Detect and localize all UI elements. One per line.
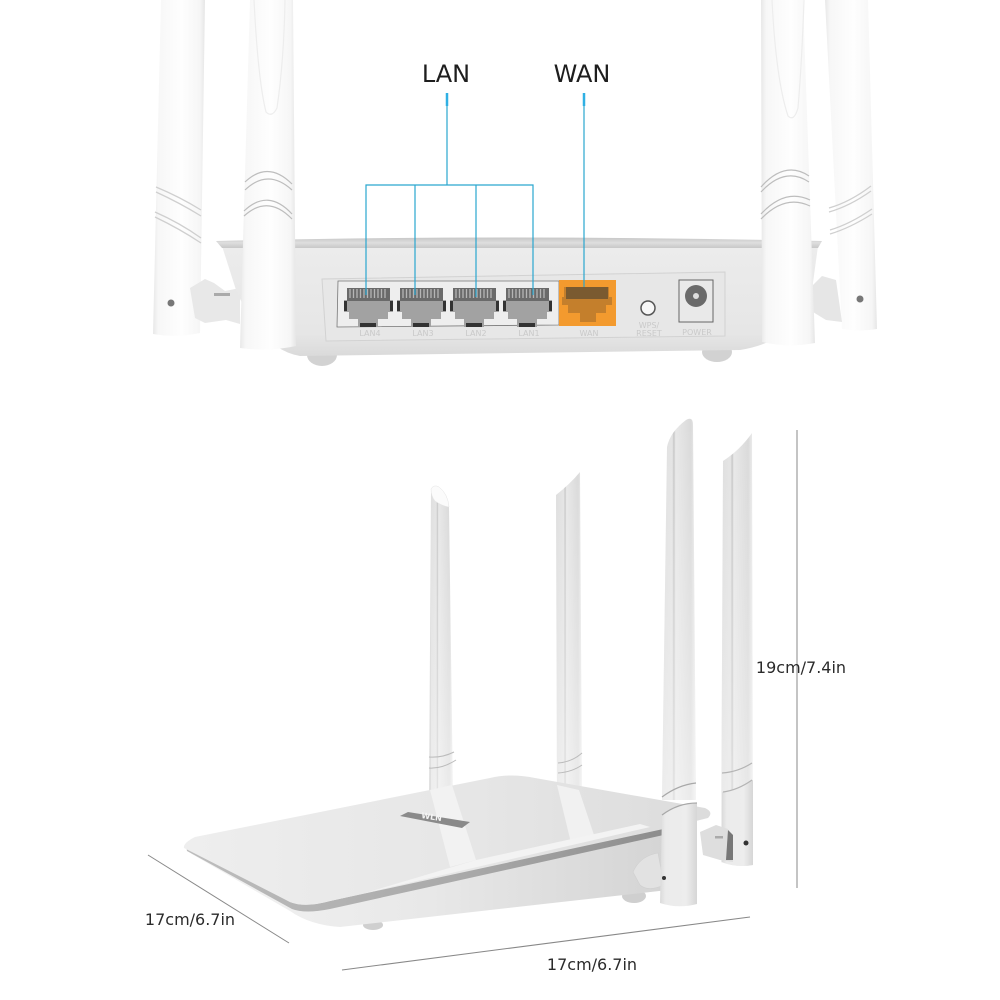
LAN port strip: [337, 281, 559, 327]
callout: LAN connector lines: [366, 93, 533, 297]
group: rear view of router: [153, 0, 877, 366]
label: WAN: WAN: [554, 60, 610, 88]
port LAN2: [450, 288, 499, 327]
port labels: WAN: [580, 329, 598, 338]
router lid edge: [216, 238, 822, 248]
port labels: [359, 321, 712, 338]
port labels: LAN2: [465, 329, 487, 338]
antenna: rear far left: [153, 0, 205, 336]
dimension: width line: [342, 917, 750, 970]
lid glossy band right: [557, 785, 595, 843]
port panel: [322, 272, 725, 341]
callout: WAN connector line: [583, 93, 585, 287]
antenna: back left: [429, 486, 456, 800]
port LAN3: [397, 288, 446, 327]
hinge left: [190, 279, 240, 324]
feet: [307, 344, 337, 366]
port labels: RESET: [636, 329, 662, 338]
WAN orange block: [559, 280, 616, 326]
port WAN: [562, 287, 612, 322]
antenna: rear inner left: [240, 0, 296, 350]
port labels: POWER: [682, 328, 712, 337]
brand badge: [400, 811, 470, 828]
port labels: LAN3: [412, 329, 434, 338]
antenna: front left tall: [660, 419, 697, 906]
router foot right: [622, 889, 646, 903]
port labels: WPS/: [639, 321, 660, 330]
foot right: [702, 342, 732, 362]
port labels: LAN4: [359, 329, 381, 338]
dimension: width label: 17cm/6.7in: [547, 955, 637, 974]
antenna: back right: [556, 472, 582, 800]
router silver edge: [186, 826, 668, 912]
router top lid: [184, 776, 710, 905]
dimension: depth label: 17cm/6.7in: [145, 910, 235, 929]
side port hinge: [633, 853, 664, 888]
port LAN1: [503, 288, 552, 327]
port labels: LAN1: [518, 329, 540, 338]
router body: [222, 246, 818, 356]
port LAN4: [344, 288, 393, 327]
label: LAN: LAN: [422, 60, 470, 88]
reset button: [641, 301, 655, 315]
dimension: height line: [796, 430, 798, 888]
antenna: front right far: [721, 433, 753, 866]
dimension: height label: 19cm/7.4in: [756, 658, 846, 677]
router hinge: [700, 825, 733, 862]
hinge right: [813, 276, 842, 322]
lid front glare: [365, 824, 650, 893]
antenna: right far: [825, 0, 877, 330]
antenna: rear inner right: [761, 0, 815, 345]
group: perspective view of router: [184, 419, 753, 930]
router underside: [190, 830, 668, 927]
power socket: [679, 280, 713, 322]
brand badge: WLN: [421, 811, 442, 823]
dimension: depth line: [148, 855, 289, 943]
lid glossy band left: [430, 785, 476, 867]
router foot left: [363, 920, 383, 930]
